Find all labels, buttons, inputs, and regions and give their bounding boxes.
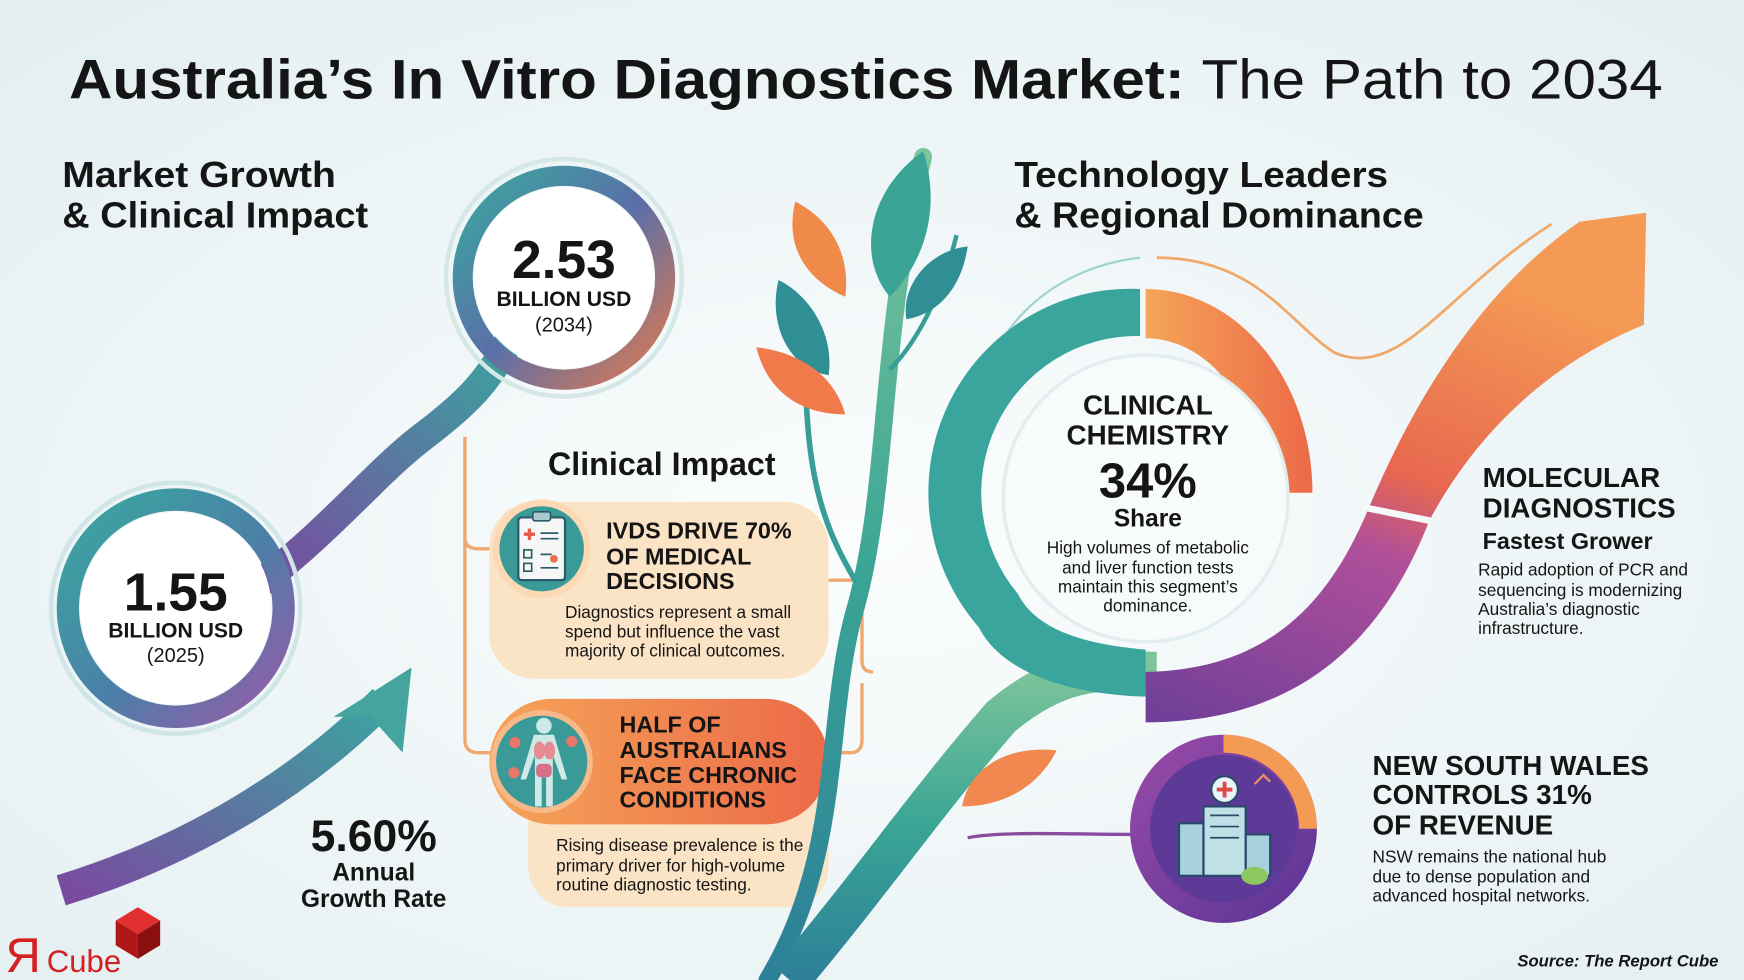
purple swoosh (1146, 213, 1646, 722)
growth rate (301, 812, 446, 913)
heading: market growth: & Clinical Impact (62, 195, 368, 235)
heading: technology leaders (1014, 155, 1424, 235)
text: molecular diagnostics: Rapid adoption of PCR and (1478, 560, 1688, 580)
teal arc (928, 289, 1146, 697)
circle: 1.55: (2025) (147, 645, 205, 667)
chart: segment donut: CHEMISTRY (1067, 420, 1230, 451)
card: IVDs: IVDS DRIVE 70% (606, 518, 792, 544)
circle: 2.53: (2034) (535, 314, 593, 337)
circle: 2.53: BILLION USD (496, 288, 631, 311)
card: chronic conditions: Rising disease prevalence is the (556, 835, 803, 855)
title: Australia’s In Vitro Diagnostics Market: The Path to 2034 (69, 47, 1663, 111)
circle: 1.55: BILLION USD (108, 619, 243, 642)
circle: 2.53: 2.53 (512, 231, 616, 290)
card: chronic conditions: primary driver for high-volume (556, 855, 785, 875)
growth rate: Growth Rate (301, 886, 446, 913)
leaf (906, 246, 968, 319)
leaf (792, 202, 846, 297)
connector bracket (465, 437, 873, 753)
text: molecular diagnostics: sequencing is modernizing (1478, 580, 1682, 600)
arrow: growth (61, 668, 412, 890)
heading: technology leaders: Technology Leaders (1014, 155, 1388, 195)
text: molecular diagnostics: DIAGNOSTICS (1483, 492, 1676, 523)
circle: 1.55 (51, 483, 300, 734)
growth band connecting circles (261, 336, 512, 582)
card: chronic conditions: routine diagnostic testing. (556, 874, 752, 894)
text: NSW: NEW SOUTH WALES (1373, 750, 1649, 781)
thin arcs decorative (979, 258, 1140, 426)
leaf (962, 750, 1057, 806)
text: NSW (1373, 750, 1649, 906)
text: NSW: advanced hospital networks. (1373, 886, 1590, 906)
text: NSW: due to dense population and (1373, 867, 1590, 887)
text: molecular diagnostics: Fastest Grower (1483, 528, 1653, 554)
vertical accent (1347, 750, 1350, 904)
plant vine (756, 151, 1157, 980)
heading: market growth: Market Growth (62, 155, 336, 195)
text: NSW: CONTROLS 31% (1373, 779, 1592, 810)
card: chronic conditions: CONDITIONS (620, 786, 766, 813)
card: chronic conditions: AUSTRALIANS (620, 737, 787, 763)
icon: body (490, 710, 593, 813)
heading: clinical impact: Clinical Impact (548, 446, 776, 482)
leaf (776, 280, 829, 375)
logo (6, 907, 160, 980)
leaf (871, 151, 931, 297)
icon: NSW hospital (1130, 735, 1317, 923)
circle: 1.55: 1.55 (124, 563, 228, 622)
text: molecular diagnostics (1478, 462, 1688, 638)
card: chronic conditions: FACE CHRONIC (620, 762, 797, 788)
chart: segment donut: and liver function tests (1062, 557, 1234, 577)
circle: 2.53 (446, 159, 682, 396)
card: chronic conditions: HALF OF (620, 711, 721, 737)
text: NSW: NSW remains the national hub (1373, 846, 1606, 866)
text: molecular diagnostics: MOLECULAR (1483, 462, 1660, 493)
text: molecular diagnostics: Australia’s diagnostic (1478, 599, 1640, 619)
chart: segment donut: High volumes of metabolic (1047, 537, 1249, 557)
icon: clipboard (493, 500, 591, 598)
card: IVDs: DECISIONS (606, 568, 735, 594)
card: chronic conditions (489, 699, 829, 907)
card: IVDs: spend but influence the vast (565, 621, 780, 641)
chart: segment donut: dominance. (1103, 595, 1192, 616)
card: IVDs: OF MEDICAL (606, 543, 751, 569)
text: molecular diagnostics: infrastructure. (1478, 618, 1584, 638)
chart: segment donut: CLINICAL (1083, 389, 1213, 420)
card: IVDs (489, 500, 829, 679)
logo: Cube (47, 944, 121, 979)
heading: technology leaders: & Regional Dominance (1014, 195, 1424, 235)
text: NSW: OF REVENUE (1373, 809, 1553, 840)
chart: segment donut (928, 213, 1646, 722)
orange arc (1146, 289, 1312, 493)
chart: segment donut: 34% (1099, 454, 1197, 508)
leaf (756, 347, 845, 414)
source: Source: The Report Cube (1517, 952, 1718, 971)
growth rate: Annual (332, 859, 415, 886)
heading: market growth (62, 155, 368, 235)
chart: segment donut: maintain this segment’s (1058, 576, 1238, 596)
connector line to NSW (968, 834, 1134, 838)
chart: segment donut: Share (1114, 505, 1182, 532)
card: IVDs: Diagnostics represent a small (565, 602, 791, 622)
card: IVDs: majority of clinical outcomes. (565, 640, 785, 660)
growth rate: 5.60% (311, 812, 437, 861)
